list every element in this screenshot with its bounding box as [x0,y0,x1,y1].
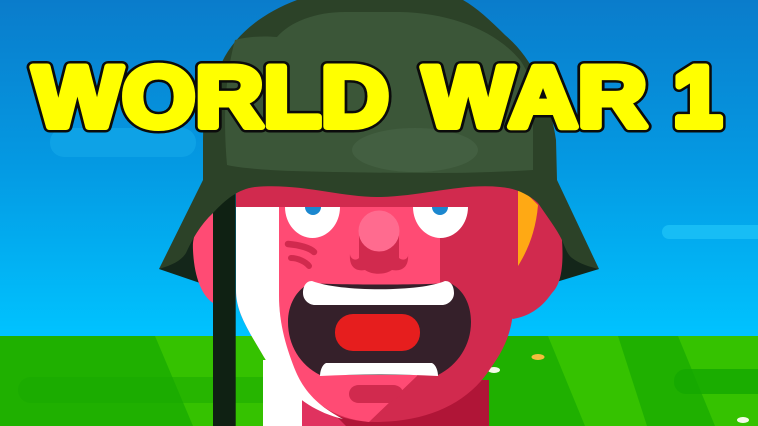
rifle strap [213,190,236,426]
face [236,178,538,422]
helmet underside [159,205,599,283]
sky background [0,0,758,336]
title: WORLD WAR 1: WORLD [33,50,389,146]
title: WORLD WAR 1: WORLD [33,50,389,146]
eyes [285,207,468,238]
neck [263,360,489,426]
title: WORLD WAR 1: 1 [673,50,722,146]
chin mark [349,385,403,403]
title: WORLD WAR 1: WAR [423,50,647,146]
grass field [0,336,758,426]
orange hair [518,185,538,266]
nose [350,210,408,274]
ears [193,180,563,319]
helmet [159,0,599,269]
scar marks [288,244,314,266]
title: WORLD WAR 1 [33,50,722,146]
title: WORLD WAR 1: WAR [423,50,647,146]
title: WORLD WAR 1: 1 [673,50,722,146]
soldier figure [159,0,599,426]
open mouth [288,281,471,376]
